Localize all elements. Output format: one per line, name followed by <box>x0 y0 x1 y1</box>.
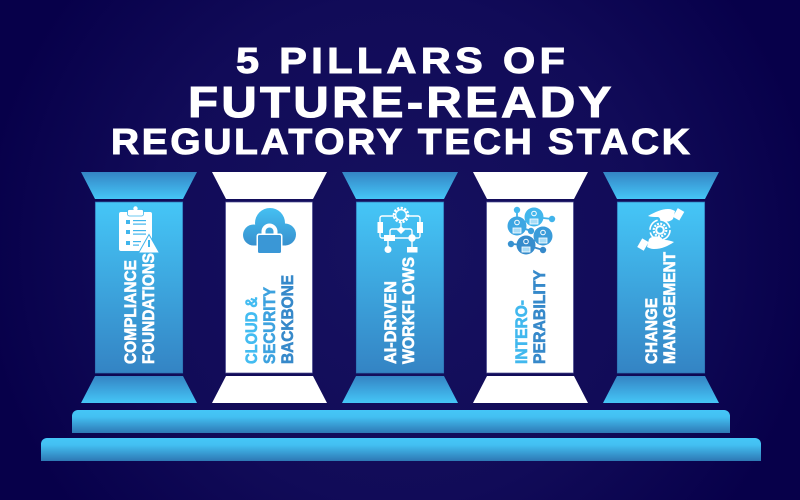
pillar 5: change management <box>603 172 719 403</box>
title: FUTURE-READY <box>188 77 611 126</box>
label: compliance foundations <box>122 253 158 364</box>
label: compliance foundations: FOUNDATIONS <box>140 253 158 364</box>
pillar 1: compliance foundations <box>81 172 197 403</box>
title: 5 PILLARS OF <box>236 41 565 81</box>
label: cloud and security backbone <box>243 275 297 364</box>
pillar 2: cloud and security backbone <box>212 172 327 403</box>
label: change management: CHANGE <box>643 298 661 364</box>
label: cloud and security backbone: CLOUD & <box>243 297 261 364</box>
label: cloud and security backbone: BACKBONE <box>279 275 297 364</box>
label: compliance foundations: COMPLIANCE <box>122 260 140 364</box>
label: change management <box>643 252 679 364</box>
title <box>111 41 690 162</box>
lower base step <box>41 438 761 461</box>
pillar 3: ai-driven workflows <box>342 172 458 403</box>
icon: hands holding gear <box>637 208 684 251</box>
icon: workflow flowchart <box>378 208 423 253</box>
label: interoperability: INTERO- <box>513 300 531 364</box>
label: ai-driven workflows: AI-DRIVEN <box>382 281 400 364</box>
label: interoperability <box>513 270 549 364</box>
label: ai-driven workflows <box>382 257 418 364</box>
label: ai-driven workflows: WORKFLOWS <box>400 257 418 364</box>
icon: clipboard with warning <box>119 206 160 253</box>
icon: cloud with lock <box>243 208 296 254</box>
pillar 4: interoperability <box>473 172 588 403</box>
label: cloud and security backbone: SECURITY <box>261 287 279 364</box>
label: interoperability: PERABILITY <box>531 270 549 364</box>
icon: connected people network <box>508 207 555 254</box>
label: change management: MANAGEMENT <box>661 252 679 364</box>
title: REGULATORY TECH STACK <box>111 121 690 162</box>
upper base step <box>72 410 730 433</box>
